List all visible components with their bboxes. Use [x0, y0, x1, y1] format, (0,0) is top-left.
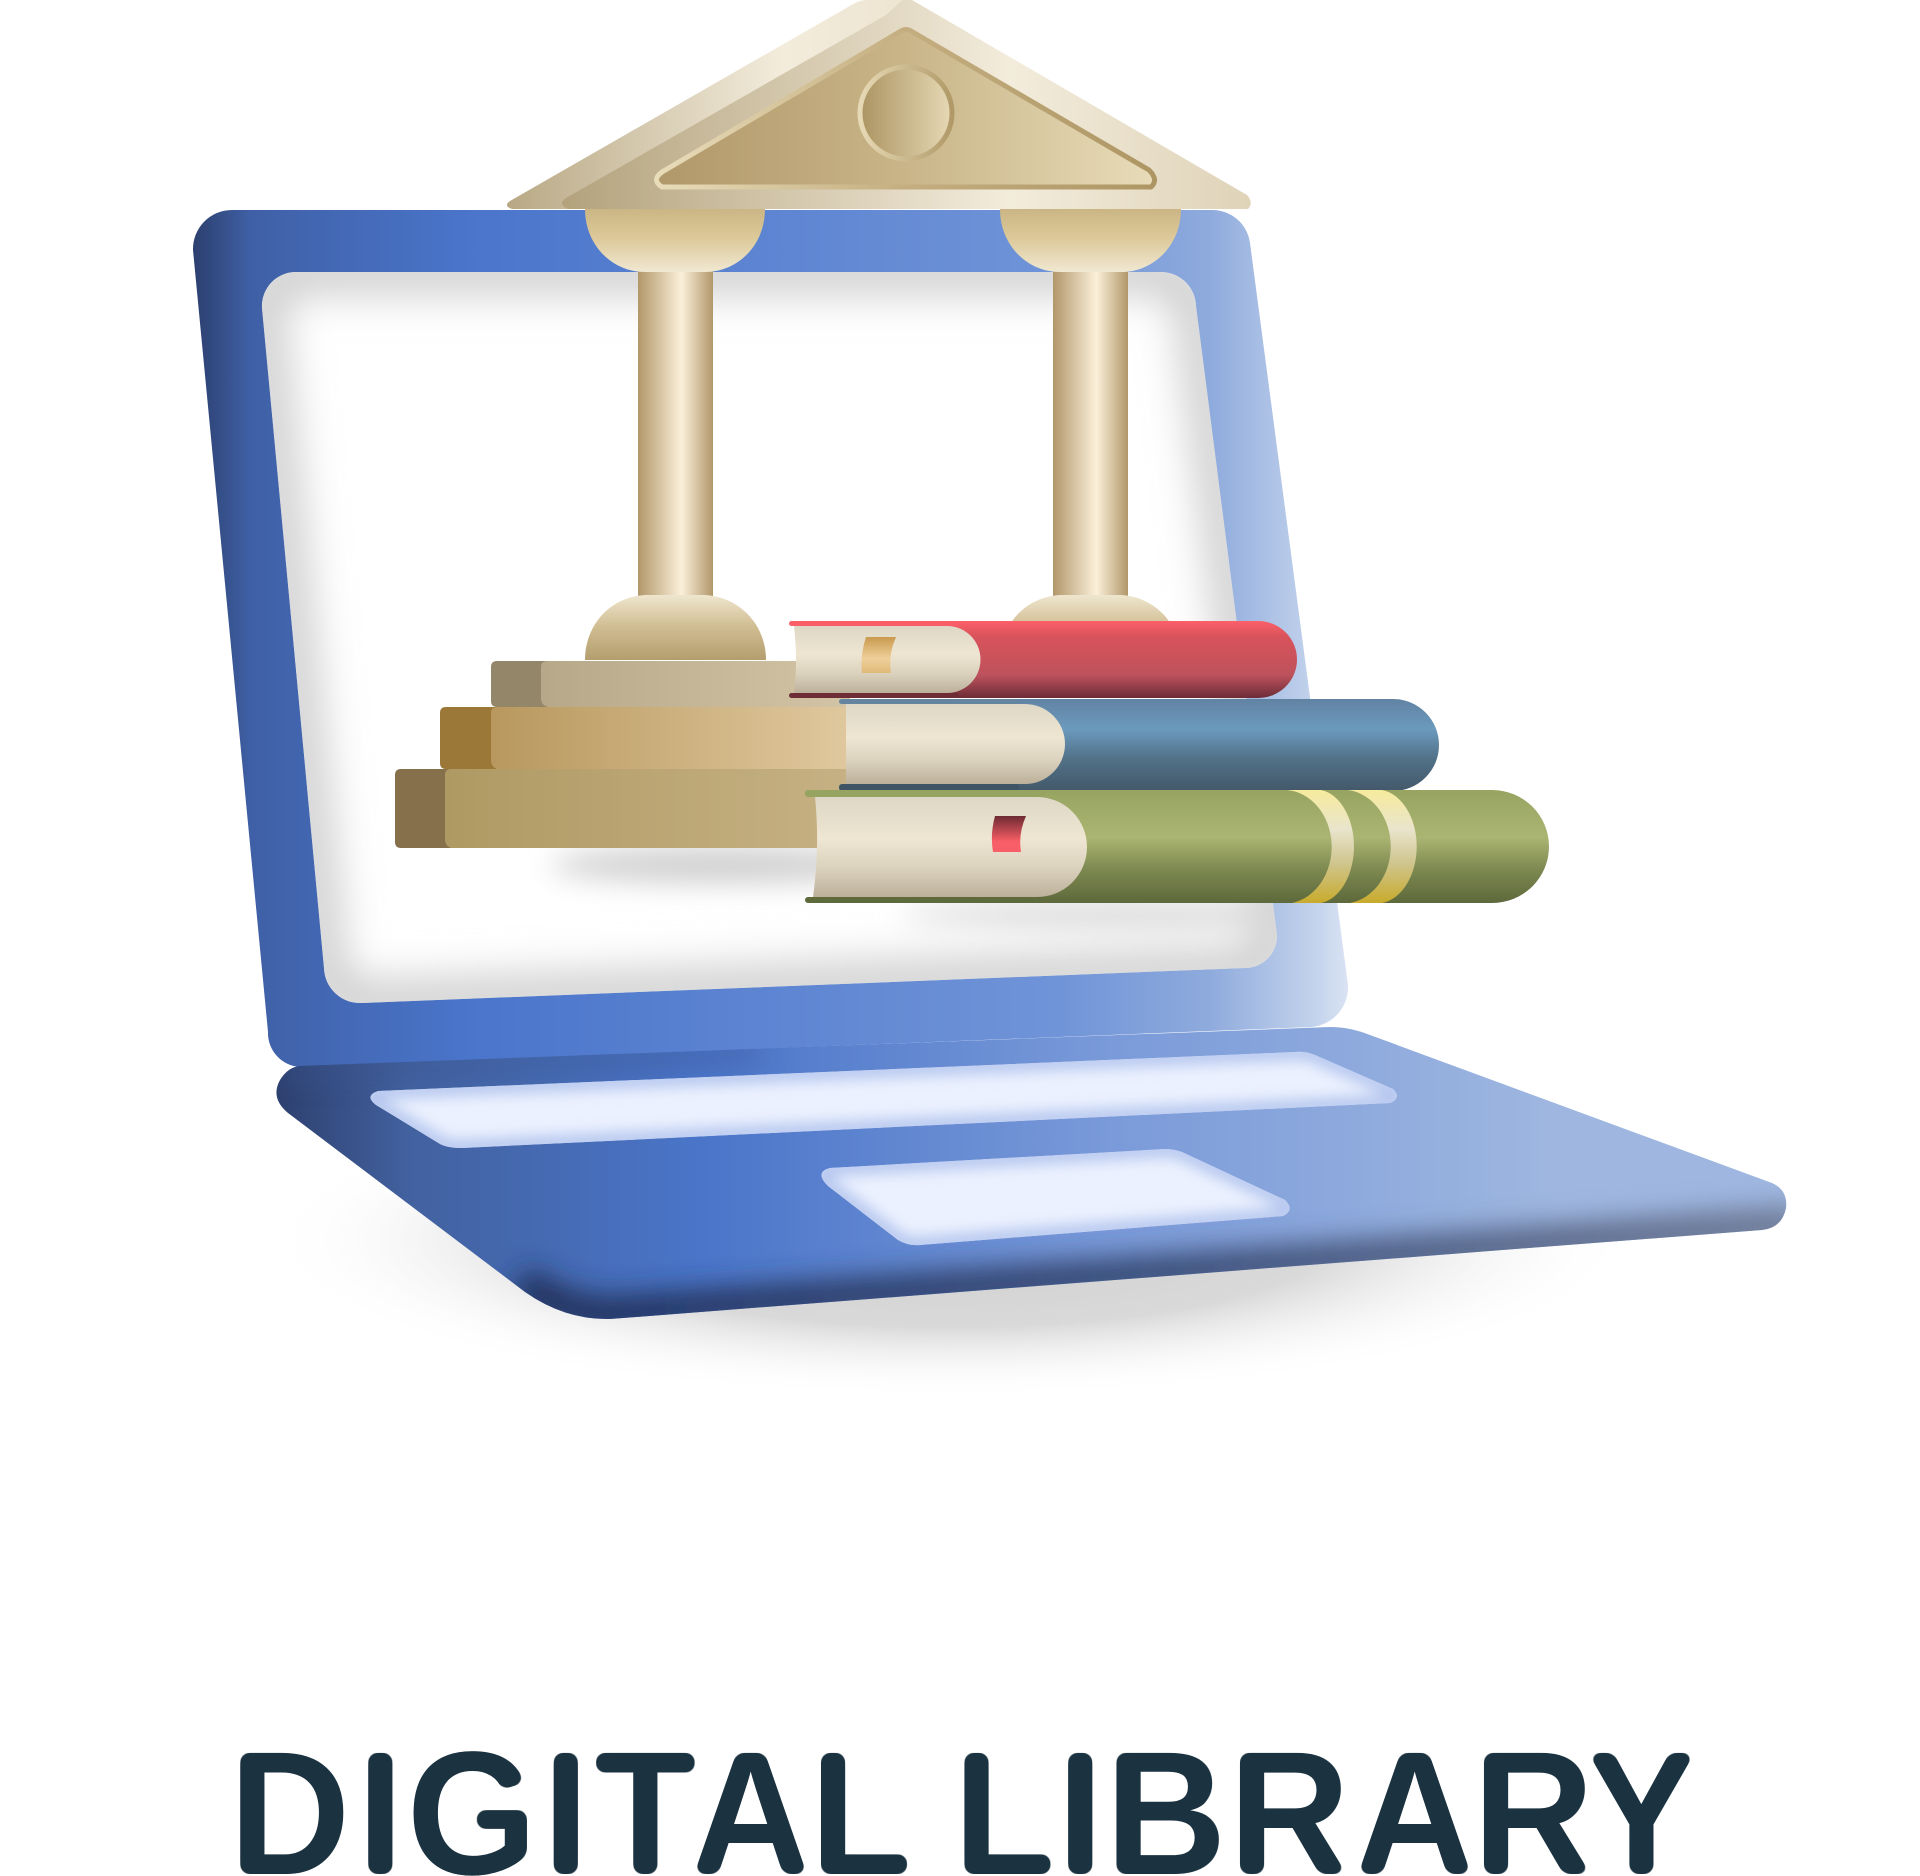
trackpad — [821, 1149, 1290, 1245]
laptop screen — [262, 272, 1360, 1003]
green book — [805, 790, 1549, 903]
keyboard area — [370, 1052, 1397, 1148]
temple — [507, 0, 1251, 660]
left column — [585, 209, 766, 660]
temple roof — [507, 0, 1251, 209]
middle tan book — [440, 707, 850, 769]
left book stack — [395, 661, 850, 848]
floor shadow — [260, 1082, 1640, 1398]
right column — [1000, 209, 1181, 660]
gold bookmark — [862, 637, 896, 673]
blue book — [839, 699, 1439, 791]
red book — [789, 621, 1297, 698]
laptop base — [276, 1027, 1800, 1319]
book stack — [395, 621, 1549, 903]
pediment panel — [656, 30, 1155, 187]
top tan book — [491, 661, 850, 707]
pediment medallion — [860, 67, 952, 159]
laptop — [193, 210, 1800, 1319]
red bookmark — [992, 816, 1026, 852]
spine bands — [1287, 790, 1417, 903]
laptop lid — [193, 210, 1348, 1067]
bottom tan book — [395, 769, 850, 848]
